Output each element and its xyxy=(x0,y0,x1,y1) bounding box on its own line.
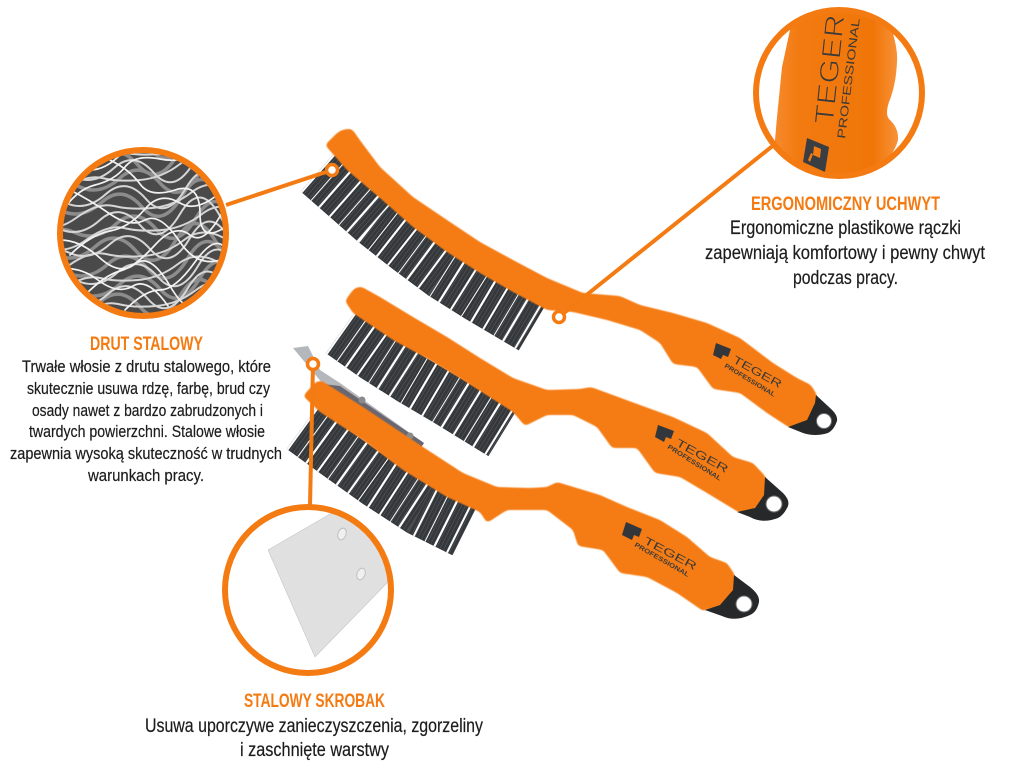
bristles of brush 2 xyxy=(341,332,502,434)
handle logo mark xyxy=(803,138,829,172)
handle of brush 2 xyxy=(345,287,766,513)
logo of brush 3: PROFESSIONAL xyxy=(633,542,690,579)
logo of brush 2 xyxy=(655,425,730,483)
detail circle: ergonomic handle xyxy=(756,0,922,180)
callout connector: scraper xyxy=(308,358,318,506)
callout connector: handle xyxy=(554,144,775,322)
brush 1 xyxy=(318,129,837,435)
detail circle: steel wire xyxy=(57,147,229,319)
logo of brush 2: PROFESSIONAL xyxy=(666,444,722,483)
brand subtitle: PROFESSIONAL xyxy=(836,17,863,139)
end cap of brush 3 xyxy=(705,575,759,619)
brush 2 xyxy=(341,287,788,521)
text block: steel wire xyxy=(10,334,282,485)
end cap of brush 1 xyxy=(788,395,837,435)
description xyxy=(10,357,282,485)
description: twardych powierzchni. Stalowe włosie xyxy=(29,422,265,441)
handle of brush 1 xyxy=(325,129,817,428)
description xyxy=(145,716,483,761)
description: i zaschnięte warstwy xyxy=(240,740,389,761)
description: Trwałe włosie z drutu stalowego, które xyxy=(22,357,271,376)
heading: ERGONOMICZNY UCHWYT xyxy=(751,194,940,215)
scraper blade xyxy=(293,346,424,449)
logo of brush 2: TEGER xyxy=(674,437,730,476)
heading: DRUT STALOWY xyxy=(90,334,203,355)
description: zapewniają komfortowy i pewny chwyt xyxy=(705,243,986,264)
description: skutecznie usuwa rdzę, farbę, brud czy xyxy=(27,379,270,398)
heading: STALOWY SKROBAK xyxy=(244,691,385,712)
handle of brush 3 xyxy=(303,381,735,611)
description: Usuwa uporczywe zanieczyszczenia, zgorzeliny xyxy=(145,716,483,737)
end cap of brush 2 xyxy=(737,477,788,521)
description xyxy=(705,218,986,289)
logo of brush 3 xyxy=(622,522,698,579)
text block: ergonomic handle xyxy=(705,194,986,289)
description: zapewnia wysoką skuteczność w trudnych xyxy=(10,444,282,463)
logo of brush 1 xyxy=(713,343,784,399)
logo of brush 1: TEGER xyxy=(731,354,784,391)
text block: steel scraper xyxy=(145,691,483,761)
description: Ergonomiczne plastikowe rączki xyxy=(730,218,961,239)
description: podczas pracy. xyxy=(793,268,898,289)
detail circle: scraper xyxy=(225,507,395,673)
bristles of brush 1 xyxy=(318,172,532,328)
callout connector: steel wire xyxy=(226,164,338,205)
bristles of brush 3 xyxy=(302,428,464,532)
brand name: TEGER xyxy=(809,13,850,126)
logo of brush 1: PROFESSIONAL xyxy=(723,363,776,399)
description: osady nawet z bardzo zabrudzonych i xyxy=(32,401,263,420)
logo of brush 3: TEGER xyxy=(642,535,698,573)
brush 3 with scraper xyxy=(293,346,759,619)
description: warunkach pracy. xyxy=(87,466,204,485)
